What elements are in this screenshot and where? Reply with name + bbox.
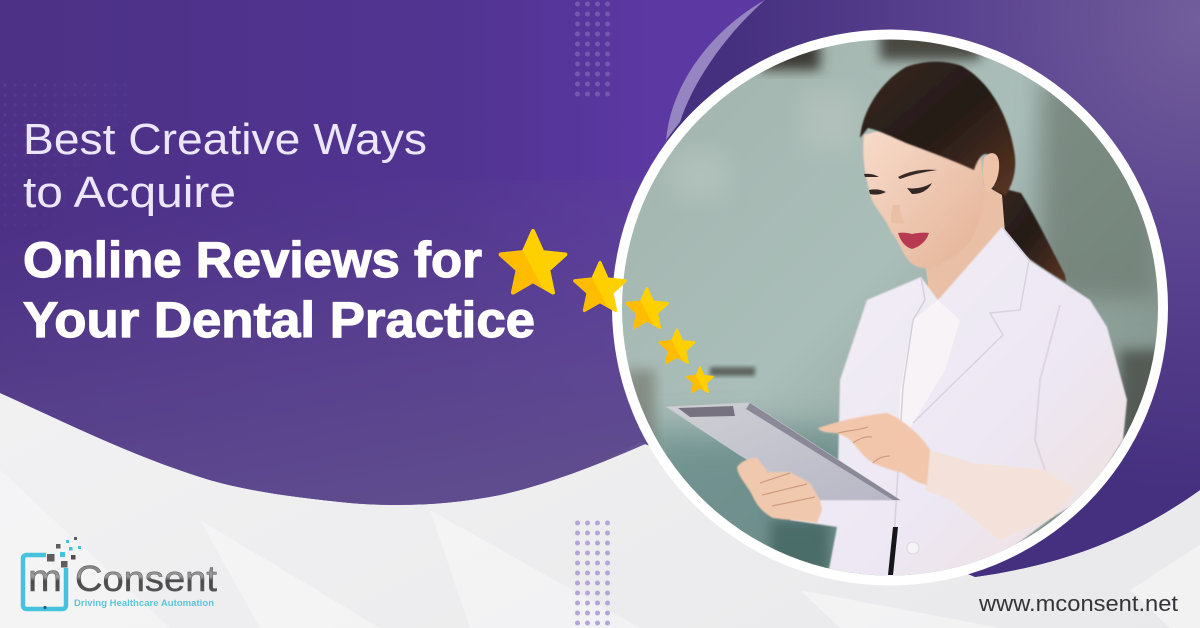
lips	[898, 233, 929, 249]
title: bold lines: Your Dental Practice	[23, 292, 535, 348]
ear	[983, 153, 999, 192]
tablet	[667, 403, 900, 500]
logo: tagline: Driving Healthcare Automation	[74, 598, 214, 609]
shirt and lapel	[888, 227, 1075, 575]
rating stars	[501, 231, 713, 392]
title: bold lines: Online Reviews for	[23, 232, 482, 288]
hair	[860, 62, 1015, 195]
title: bold lines	[23, 232, 535, 348]
nose shadow	[891, 205, 905, 224]
website URL: www.mconsent.net	[978, 591, 1179, 616]
dot grid: top	[575, 2, 610, 96]
white photo ring	[612, 30, 1168, 586]
mConsent logo: Consent	[75, 558, 217, 599]
blurred clinic background	[625, 25, 1170, 580]
title: light lines	[23, 115, 427, 217]
title	[23, 115, 535, 348]
eyebrows and eyes	[864, 170, 937, 195]
crescent accent	[666, 0, 765, 140]
ponytail	[990, 185, 1066, 282]
logo: tablet outline	[23, 555, 66, 609]
mConsent logo	[23, 537, 217, 609]
logo: wordmark: m	[28, 558, 62, 600]
dot grid: bottom	[575, 520, 610, 626]
circular photo: dentist with tablet	[620, 25, 1170, 590]
title: light lines: Best Creative Ways	[23, 115, 427, 164]
logo: pixels	[47, 537, 81, 568]
title: light lines: to Acquire	[23, 168, 236, 217]
lower hand	[737, 458, 822, 523]
pointing hand	[818, 413, 930, 485]
face	[863, 125, 984, 268]
lab coat	[790, 227, 1127, 590]
right darker purple panel	[668, 0, 1200, 577]
neck	[926, 186, 1005, 300]
